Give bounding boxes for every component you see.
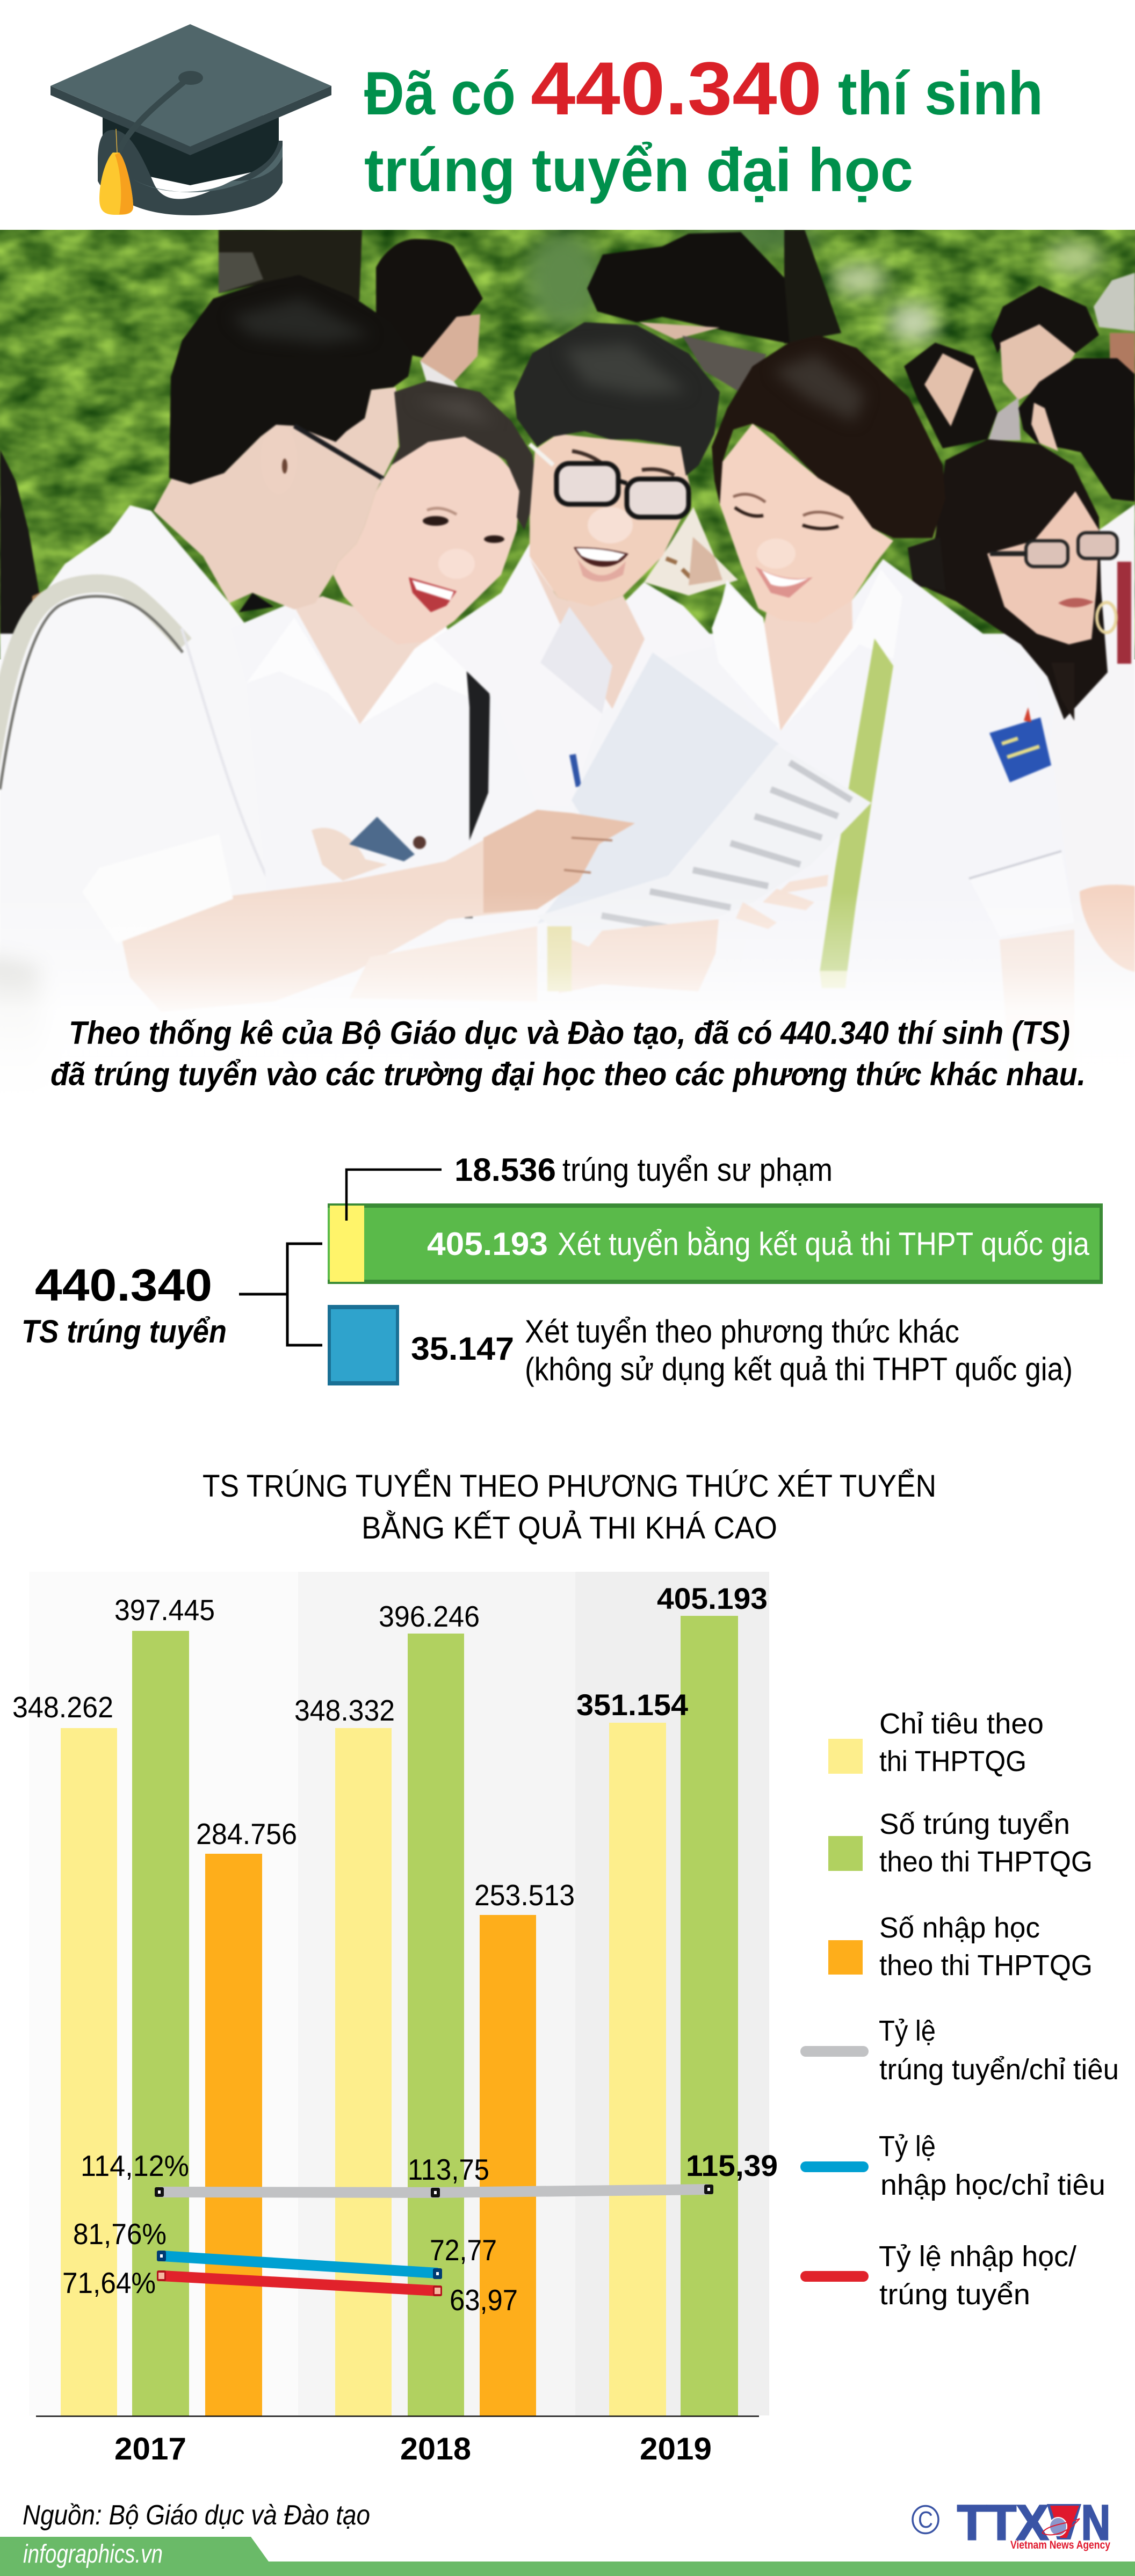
yellow segment: 18.536: trúng tuyển sư phạm xyxy=(562,1152,833,1188)
legend: quota: thi THPTQG xyxy=(879,1745,1026,1777)
logo: TTXVN xyxy=(913,2495,1110,2551)
year labels: 2017 xyxy=(114,2432,186,2466)
boy 3 shirt xyxy=(447,543,710,694)
base shirts xyxy=(0,632,1056,930)
bar value labels xyxy=(12,1581,768,1912)
girl 2 shirt xyxy=(243,605,310,890)
logo: TTXVN: TTX xyxy=(957,2495,1049,2550)
chart heading xyxy=(203,1469,936,1545)
bar value labels: 405.193 xyxy=(657,1581,768,1615)
total label: 440.340 xyxy=(35,1260,212,1310)
year labels xyxy=(114,2432,712,2466)
icon: graduation cap xyxy=(50,24,331,215)
bar value labels: 397.445 xyxy=(114,1593,215,1627)
man strap xyxy=(0,584,185,773)
legend: enrolled xyxy=(828,1912,1093,1982)
man body xyxy=(32,504,245,635)
girl 4 face xyxy=(720,424,893,623)
blue box: 35.147: (không sử dụng kết quả thi THPT quốc gia) xyxy=(525,1351,1073,1387)
legend: admitted: theo thi THPTQG xyxy=(879,1846,1093,1878)
legend: enrolled/quota line: nhập học/chỉ tiêu xyxy=(880,2169,1105,2201)
year labels: 2019 xyxy=(640,2432,712,2466)
line value labels: 115,39 xyxy=(686,2149,778,2182)
line value labels xyxy=(62,2149,778,2317)
blue box: 35.147 xyxy=(328,1305,1073,1387)
chart heading: TS TRÚNG TUYỂN THEO PHƯƠNG THỨC XÉT TUYỂN xyxy=(203,1469,936,1504)
title: thí sinh xyxy=(838,60,1043,128)
girl 2 neck and face xyxy=(333,437,519,644)
title: trúng tuyển đại học xyxy=(364,136,913,205)
title: 440.340 xyxy=(531,46,822,130)
bars 2019 xyxy=(609,1616,738,2417)
legend: enrolled: Số nhập học xyxy=(879,1912,1040,1944)
logo: TTXVN: C xyxy=(918,2507,933,2533)
legend: enrolled/admitted line xyxy=(806,2240,1076,2311)
source note: Nguồn: Bộ Giáo dục và Đào tạo xyxy=(23,2500,370,2531)
legend: admitted/quota line xyxy=(806,2015,1119,2086)
legend: enrolled/admitted line: Tỷ lệ nhập học/ xyxy=(879,2240,1076,2273)
chart heading: BẰNG KẾT QUẢ THI KHÁ CAO xyxy=(362,1511,777,1545)
bars 2018 xyxy=(335,1634,536,2417)
tree connector xyxy=(239,1244,322,1345)
sleeve badge xyxy=(989,707,1051,782)
line value labels: 63,97 xyxy=(450,2283,518,2317)
olive bag strap xyxy=(820,638,893,972)
man face xyxy=(154,387,399,609)
breakdown diagram xyxy=(21,1152,1103,1387)
green bar: 405.193 xyxy=(328,1203,1103,1284)
yellow segment: 18.536 xyxy=(330,1152,833,1282)
trunk and background crowd xyxy=(219,230,362,301)
legend: admitted xyxy=(828,1808,1093,1878)
line value labels: 71,64% xyxy=(62,2266,156,2299)
legend: admitted: Số trúng tuyển xyxy=(879,1808,1070,1840)
chart xyxy=(12,1572,778,2466)
title xyxy=(364,46,1043,205)
bar value labels: 253.513 xyxy=(474,1878,575,1912)
blue box: 35.147: 35.147 xyxy=(411,1331,514,1367)
legend: enrolled/quota line xyxy=(806,2130,1105,2201)
bar value labels: 284.756 xyxy=(196,1817,297,1851)
legend: enrolled/admitted line: trúng tuyển xyxy=(879,2279,1030,2311)
legend xyxy=(806,1708,1119,2311)
total label xyxy=(21,1260,227,1349)
line: enrolled / admitted xyxy=(157,2270,442,2296)
bar value labels: 396.246 xyxy=(379,1600,480,1633)
girl 4 shirt xyxy=(709,559,1074,1106)
chart backgrounds xyxy=(29,1572,769,2415)
arm and hands xyxy=(82,810,828,1012)
legend: admitted/quota line: trúng tuyển/chỉ tiêu xyxy=(879,2053,1119,2086)
photo fade xyxy=(0,891,1135,1106)
logo: TTXVN: Vietnam News Agency xyxy=(1010,2539,1110,2551)
green bar: 405.193: 405.193 xyxy=(427,1226,548,1262)
logo: TTXVN: N xyxy=(1081,2495,1110,2550)
line: admitted / quota xyxy=(155,2185,713,2197)
far right girl xyxy=(1098,504,1135,635)
blue box: 35.147: Xét tuyển theo phương thức khác xyxy=(525,1314,959,1349)
photo: students reading exam results xyxy=(0,230,1135,1007)
line value labels: 72,77 xyxy=(430,2233,497,2267)
line value labels: 81,76% xyxy=(73,2217,167,2251)
legend: enrolled: theo thi THPTQG xyxy=(879,1949,1093,1982)
boy 3 face xyxy=(530,434,691,607)
title: Đã có xyxy=(364,60,516,128)
man hair xyxy=(169,275,413,484)
line: enrolled / quota xyxy=(157,2251,442,2279)
bars 2017 xyxy=(61,1631,262,2417)
bar value labels: 348.332 xyxy=(294,1694,395,1727)
legend: quota: Chỉ tiêu theo xyxy=(879,1708,1044,1740)
legend: enrolled/quota line: Tỷ lệ xyxy=(879,2130,936,2163)
intro text xyxy=(50,1015,1086,1092)
legend: admitted/quota line: Tỷ lệ xyxy=(879,2015,936,2047)
patterned shirt behind xyxy=(644,507,738,596)
footer band xyxy=(0,2537,1135,2576)
line value labels: 113,75 xyxy=(408,2153,489,2186)
legend: quota xyxy=(828,1708,1044,1777)
year labels: 2018 xyxy=(400,2432,471,2466)
intro text: Theo thống kê của Bộ Giáo dục và Đào tạo, đã có 440.340 thí sinh (TS) xyxy=(69,1015,1070,1051)
line value labels: 114,12% xyxy=(81,2149,189,2182)
total label: TS trúng tuyển xyxy=(21,1314,227,1349)
axis xyxy=(36,2415,759,2417)
yellow segment: 18.536: 18.536 xyxy=(454,1152,556,1188)
bar value labels: 348.262 xyxy=(12,1690,113,1724)
bar value labels: 351.154 xyxy=(576,1688,688,1722)
papers xyxy=(537,652,871,967)
footer band: infographics.vn xyxy=(23,2540,163,2568)
